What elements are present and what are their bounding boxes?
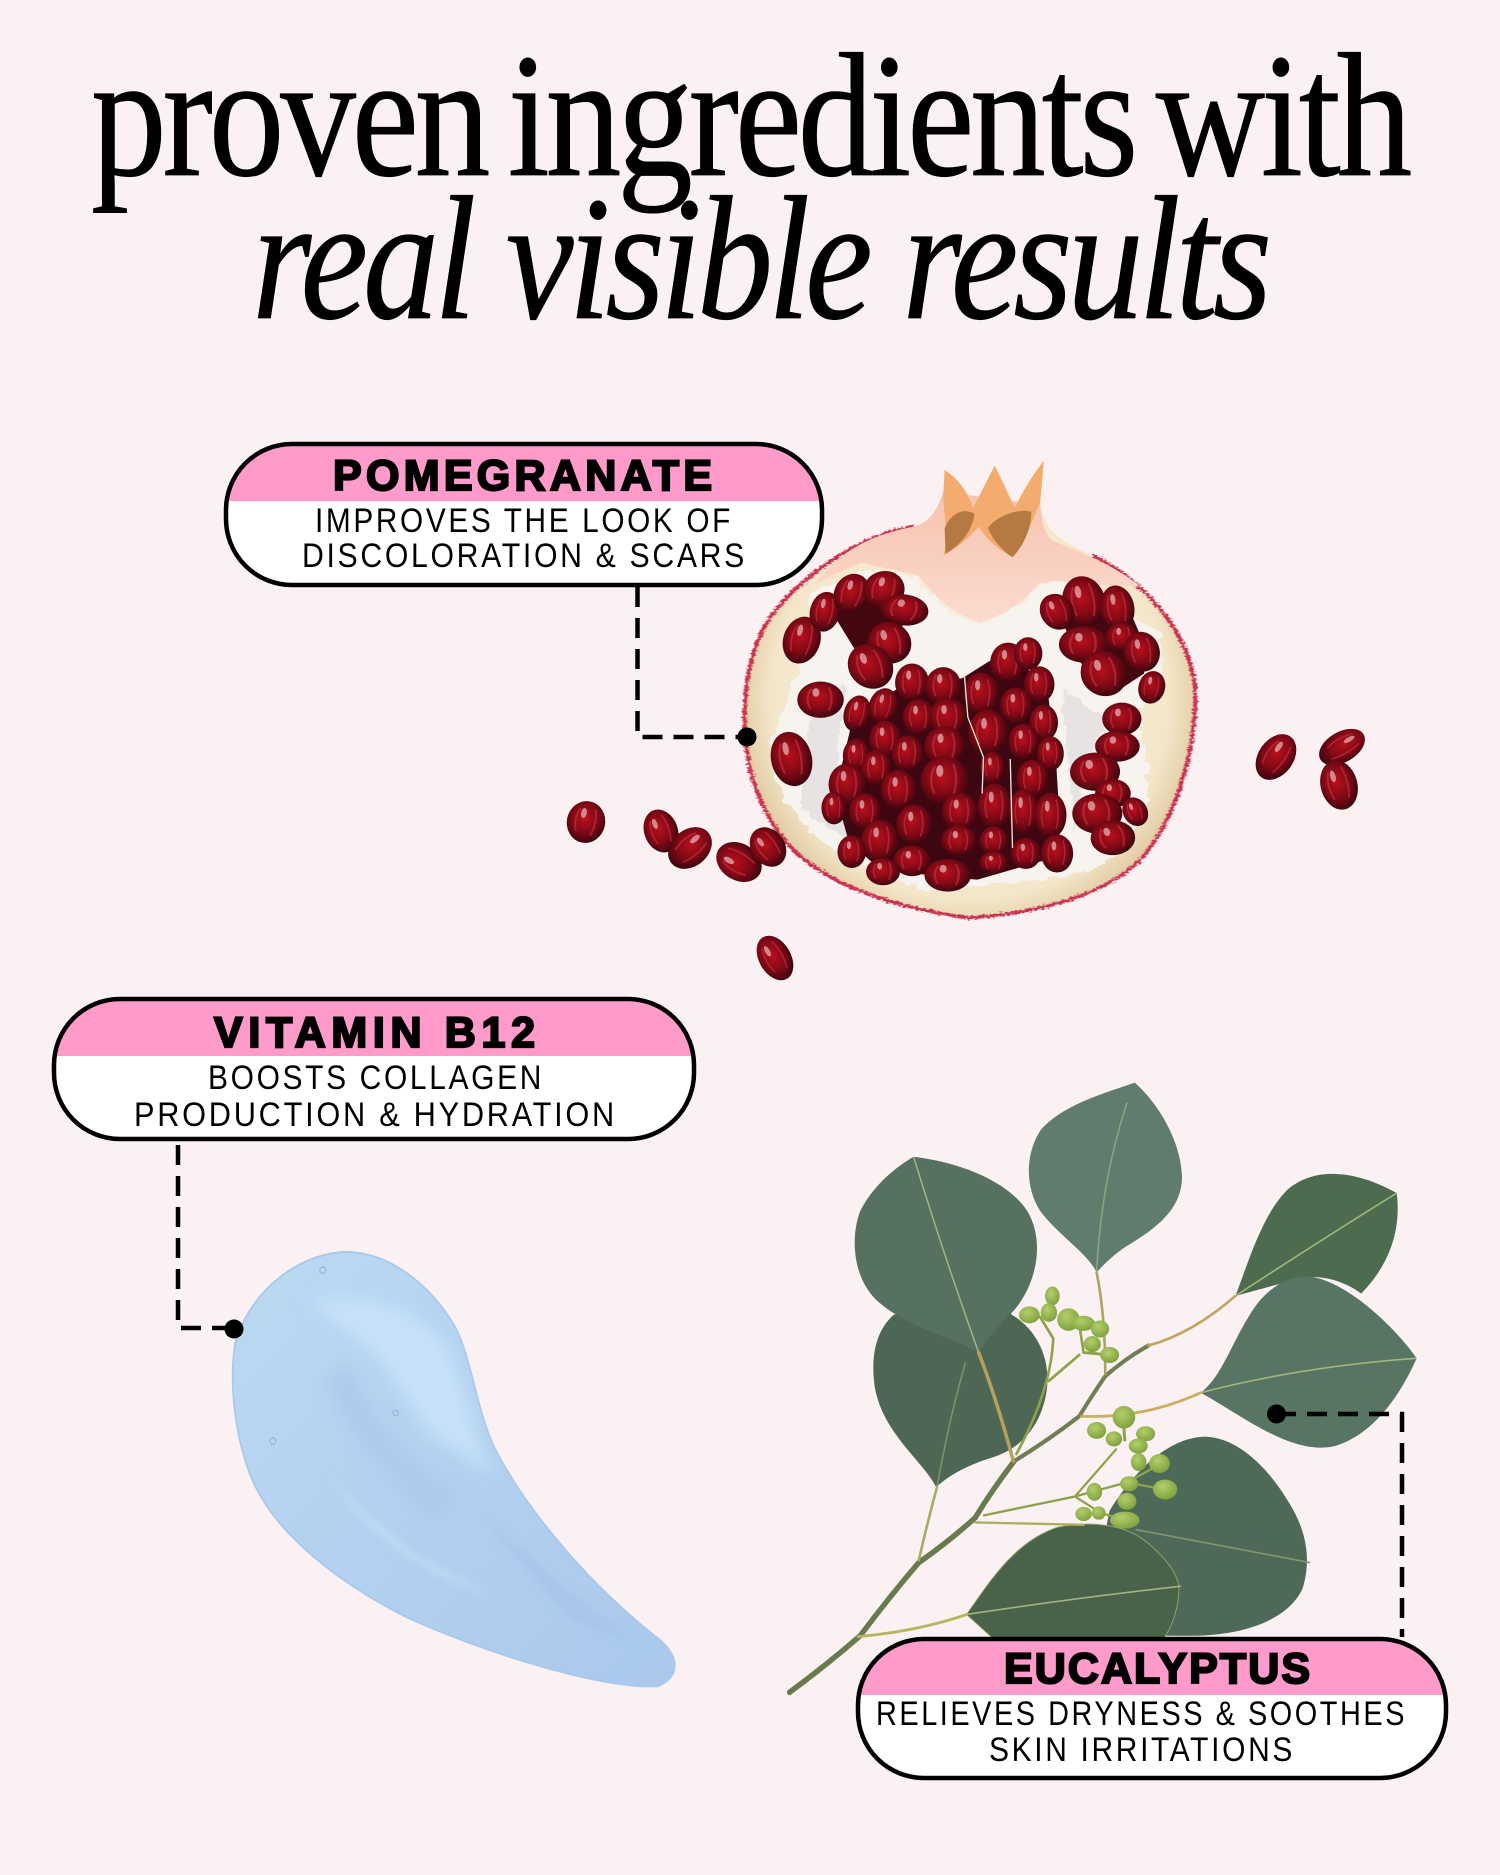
callout: vitamin B12: VITAMIN B12: [214, 1009, 535, 1057]
title: [91, 18, 1411, 357]
connector: eucalyptus: [1267, 1404, 1402, 1637]
illustration: eucalyptus branch: [790, 1083, 1417, 1692]
callout: eucalyptus: [858, 1639, 1446, 1778]
membrane streaks between seeds: [964, 674, 1012, 848]
illustration: pomegranate: [745, 461, 1196, 918]
pomegranate crown: [943, 461, 1044, 557]
callout: eucalyptus: SKIN IRRITATIONS: [989, 1731, 1295, 1769]
pomegranate dark seed mass: [838, 655, 1057, 877]
branch stems: [790, 1272, 1235, 1692]
pomegranate membrane: [772, 570, 1163, 892]
callout: vitamin B12: PRODUCTION & HYDRATION: [134, 1096, 617, 1134]
callout: pomegranate: POMEGRANATE: [333, 452, 712, 500]
callout: pomegranate: IMPROVES THE LOOK OF: [315, 502, 733, 540]
leaf: bottom: [966, 1524, 1179, 1638]
pill body: [226, 444, 822, 585]
callout: vitamin B12: BOOSTS COLLAGEN: [208, 1059, 544, 1097]
illustration: blue cream swatch: [233, 1252, 675, 1686]
pomegranate neck and top flesh: [816, 492, 1140, 623]
callout: vitamin B12: [54, 999, 694, 1139]
cream highlights: [270, 1267, 647, 1646]
pomegranate rind: [745, 461, 1196, 918]
callout: eucalyptus: EUCALYPTUS: [1004, 1645, 1310, 1693]
eucalyptus buds: [1019, 1287, 1177, 1529]
callout: pomegranate: DISCOLORATION & SCARS: [302, 537, 747, 575]
leaf: right: [1201, 1276, 1417, 1448]
connector: vitamin B12: [178, 1145, 244, 1338]
leaf: upper right: [1235, 1174, 1398, 1296]
leaf: lower right, behind: [1084, 1437, 1307, 1636]
pomegranate seeds: [767, 568, 1168, 892]
leaf: upper left: [855, 1157, 1037, 1353]
leaf: top centre: [1029, 1083, 1182, 1272]
leaf veins: [914, 1102, 1417, 1614]
loose pomegranate seeds: [563, 721, 1371, 987]
callout: eucalyptus: RELIEVES DRYNESS & SOOTHES: [876, 1695, 1407, 1733]
callout: pomegranate: [226, 444, 822, 585]
rind red edge: [745, 526, 1196, 918]
title: real visible results: [252, 161, 1268, 357]
connector: pomegranate: [638, 587, 756, 746]
leaf: lower left, behind: [873, 1296, 1047, 1487]
